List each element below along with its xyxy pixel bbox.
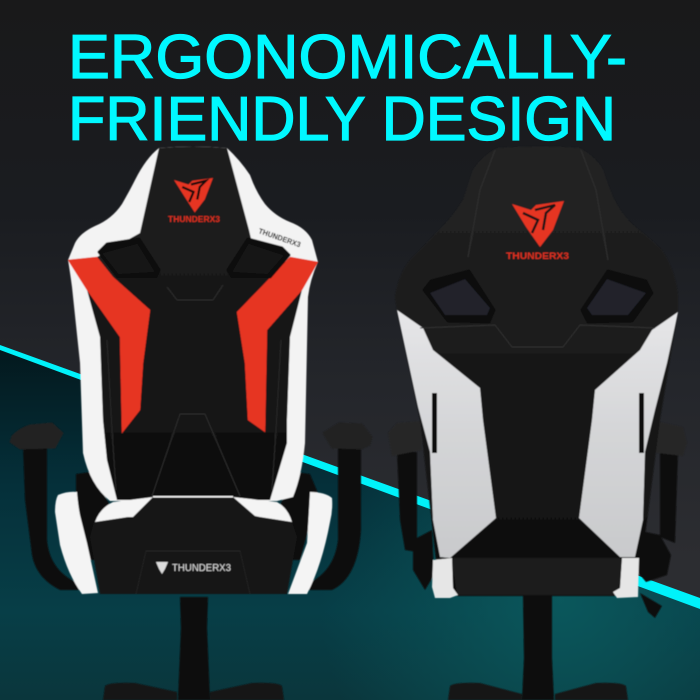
front chair: red logo (174, 178, 213, 212)
rear chair: white seat brackets (432, 558, 639, 598)
rear chair: left headrest slot (424, 271, 494, 322)
front chair: right headrest slot (228, 239, 289, 277)
front chair: right red panel (237, 257, 318, 432)
rear chair: right headrest slot (582, 271, 652, 322)
front chair: base and gas cylinder (103, 597, 284, 700)
rear chair: side slits (432, 393, 644, 453)
front chair: seat brand text: THUNDERX3 (172, 563, 231, 574)
rear chair (right) (388, 146, 687, 700)
front chair: seat logo icon (156, 562, 168, 574)
rear chair: red logo (512, 201, 564, 247)
front chair: left headrest slot (99, 239, 159, 277)
rear chair: adjustment lever (640, 593, 662, 618)
rear chair: left armrest (388, 421, 422, 552)
cyan diagonal light line (0, 345, 700, 609)
title: FRIENDLY DESIGN (68, 85, 616, 154)
rear chair: seat rear band (452, 558, 622, 595)
front chair: red brand text: THUNDERX3 (168, 215, 221, 224)
rear chair: back seam lines (420, 150, 655, 347)
rear chair: back black shell (395, 146, 678, 596)
title (68, 23, 627, 154)
front chair: back black center (87, 146, 302, 500)
front chair: seat white wings (55, 492, 332, 594)
front chair: seat cushion (90, 497, 297, 594)
front chair: seat badge panel (136, 551, 250, 594)
rear chair: left white panel (397, 310, 496, 558)
front chair (left) (10, 146, 372, 700)
rear chair: right armrest (650, 421, 687, 543)
rear chair: red brand text: THUNDERX3 (506, 251, 569, 262)
rear chair: right white panel (579, 312, 678, 557)
front chair: back panel seam lines (152, 285, 240, 496)
teal floor (0, 347, 700, 700)
front chair: back white shell (68, 146, 318, 501)
front chair: seat hinges (76, 472, 318, 560)
front chair: left red panel (68, 257, 150, 433)
rear chair: tilt mechanism (413, 530, 671, 590)
front chair: side bolster seams (107, 340, 281, 490)
front chair: black wing brand text: THUNDERX3 (257, 226, 302, 249)
front chair: left armrest (10, 423, 80, 590)
front chair: seat front white panels (95, 496, 292, 522)
rear chair: base and gas cylinder (448, 596, 628, 700)
title: ERGONOMICALLY- (68, 23, 627, 92)
front chair: right armrest (307, 423, 372, 590)
